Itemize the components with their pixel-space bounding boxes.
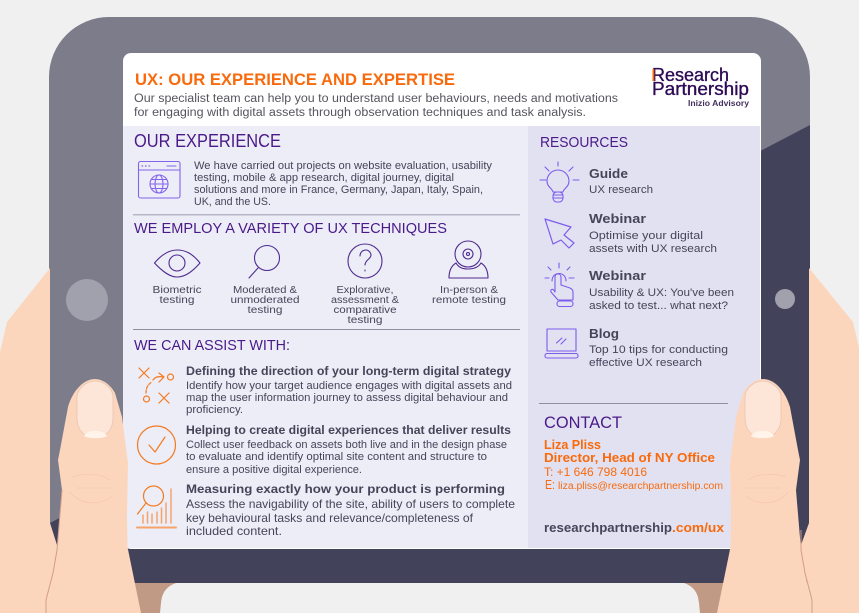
contact details: liza.pliss@researchpartnership.com — [558, 481, 723, 492]
contact details: Liza Pliss — [544, 438, 601, 452]
resource: webinar usability: asked to test... what next? — [589, 300, 728, 312]
item: product performance — [186, 482, 515, 538]
resource: blog: effective UX research — [589, 357, 702, 369]
technique: moderated and unmoderated testing: Moderated & — [233, 285, 297, 296]
item: digital strategy: Defining the direction of your long-term digital strategy — [186, 366, 512, 378]
technique: in-person and remote testing: In-person & — [440, 285, 498, 296]
contact details: T: +1 646 798 4016 — [544, 465, 647, 479]
contact details: Director, Head of NY Office — [544, 451, 715, 465]
technique: biometric testing: Biometric — [152, 285, 202, 296]
resource: blog — [589, 326, 728, 369]
technique: biometric testing — [152, 250, 202, 306]
experience text: solutions and more in France, Germany, Japan, Italy, Spain, — [194, 184, 483, 196]
technique: moderated and unmoderated testing: unmoderated — [230, 295, 300, 306]
item: digital experiences: Collect user feedback on assets both live and in the design phase — [186, 439, 507, 451]
icon: hand pressing — [545, 263, 574, 306]
resource: guide — [589, 166, 653, 196]
right palm — [801, 268, 859, 613]
icon: check mark in circle — [138, 426, 176, 464]
resource: guide: Guide — [589, 166, 628, 181]
technique: moderated and unmoderated testing — [230, 246, 300, 316]
button: right tablet button — [775, 289, 795, 309]
intro text: Our specialist team can help you to understand user behaviours, needs and motivations — [134, 93, 618, 105]
header — [134, 70, 618, 119]
forearm shadows below tablet — [130, 583, 728, 613]
right thumb — [717, 379, 812, 613]
item: digital experiences: ensure a positive digital experience. — [186, 464, 362, 476]
technique: in-person and remote testing: remote testing — [432, 295, 506, 306]
technique: in-person and remote testing — [432, 241, 506, 306]
thumb nail — [77, 381, 113, 438]
technique: explorative testing — [331, 244, 399, 326]
right thumb crease line — [801, 530, 812, 613]
icon: strategy play diagram — [139, 368, 174, 403]
resource: webinar usability — [589, 268, 734, 312]
resource: blog: Blog — [589, 326, 619, 341]
resource: guide: UX research — [589, 184, 653, 196]
palm — [0, 268, 57, 613]
resource: webinar optimise: Optimise your digital — [589, 230, 703, 242]
left hand holding tablet — [0, 268, 141, 613]
resource: webinar optimise: Webinar — [589, 211, 646, 226]
technique: explorative testing: assessment & — [331, 295, 399, 306]
heading: resources: RESOURCES — [540, 134, 628, 151]
item: product performance: Assess the navigability of the site, ability of users to complete — [186, 498, 515, 511]
item: digital strategy: Identify how your target audience engages with digital assets and — [186, 380, 512, 392]
panel: UX techniques — [134, 220, 506, 326]
item: digital experiences — [186, 425, 511, 476]
tablet screen — [123, 53, 761, 549]
panel: resources — [540, 134, 734, 369]
experience text — [194, 160, 493, 208]
knuckle creases — [70, 474, 113, 503]
heading: assist: WE CAN ASSIST WITH: — [134, 337, 290, 354]
logo: Research Partnership: Research — [652, 65, 729, 85]
panel: we can assist with — [134, 337, 515, 538]
resource: blog: Top 10 tips for conducting — [589, 344, 728, 356]
resource: webinar optimise — [589, 211, 717, 255]
icon: light bulb — [540, 162, 579, 202]
item: product performance: key behavioural tasks and relevance/completeness of — [186, 512, 474, 525]
item: digital experiences: to evaluate and identify optimal site content and structure to — [186, 451, 487, 463]
thumb — [46, 379, 141, 613]
heading: techniques: WE EMPLOY A VARIETY OF UX TECHNIQUES — [134, 220, 447, 237]
item: product performance: included content. — [186, 525, 282, 538]
right nail half moon — [751, 431, 774, 438]
right hand holding tablet — [717, 268, 859, 613]
item: digital strategy: map the user information journey to assess digital behaviour and — [186, 392, 508, 404]
resource: webinar usability: Usability & UX: You've been — [589, 287, 734, 299]
technique: explorative testing: comparative — [334, 305, 397, 316]
resource: webinar optimise: assets with UX research — [589, 243, 717, 255]
icon: browser window with globe — [138, 162, 180, 198]
website link: researchpartnership — [544, 521, 672, 535]
icon: cursor arrow — [545, 219, 574, 248]
nail half moon — [84, 431, 107, 438]
logo: Research Partnership: Partnership — [652, 79, 749, 99]
intro text — [134, 93, 618, 119]
intro text: for engaging with digital assets through observation techniques and task analysis. — [134, 107, 586, 119]
right knuckle creases — [745, 474, 788, 503]
contact details — [544, 438, 723, 492]
item: product performance: Measuring exactly how your product is performing — [186, 482, 505, 496]
logo: Research Partnership — [652, 65, 749, 108]
logo: Research Partnership: Inizio Advisory — [688, 98, 749, 108]
technique: biometric testing: testing — [160, 295, 194, 306]
title: UX: OUR EXPERIENCE AND EXPERTISE — [135, 70, 455, 89]
contact details: E: — [545, 478, 555, 492]
experience text: testing, mobile & app research, digital journey, digital — [194, 172, 454, 184]
right thumb nail — [745, 381, 781, 438]
icon: laptop — [545, 329, 578, 358]
heading: contact: CONTACT — [544, 413, 622, 432]
heading: our experience: OUR EXPERIENCE — [134, 131, 281, 151]
technique: explorative testing: Explorative, — [336, 285, 394, 296]
technique: explorative testing: testing — [348, 315, 382, 326]
website link: .com/ux — [672, 521, 724, 535]
icon: magnifier and bar chart — [137, 486, 176, 528]
technique: moderated and unmoderated testing: testing — [248, 305, 282, 316]
button: left tablet button — [66, 279, 108, 321]
thumb crease line — [46, 490, 62, 613]
item: digital strategy: proficiency. — [186, 404, 243, 416]
panel: contact — [544, 413, 724, 535]
resource: webinar usability: Webinar — [589, 268, 646, 283]
item: digital experiences: Helping to create digital experiences that deliver results — [186, 425, 511, 437]
panel: our experience — [134, 131, 493, 208]
item: digital strategy — [186, 366, 512, 416]
experience text: We have carried out projects on website evaluation, usability — [194, 160, 493, 172]
website link — [544, 521, 724, 535]
experience text: UK, and the US. — [194, 196, 271, 208]
